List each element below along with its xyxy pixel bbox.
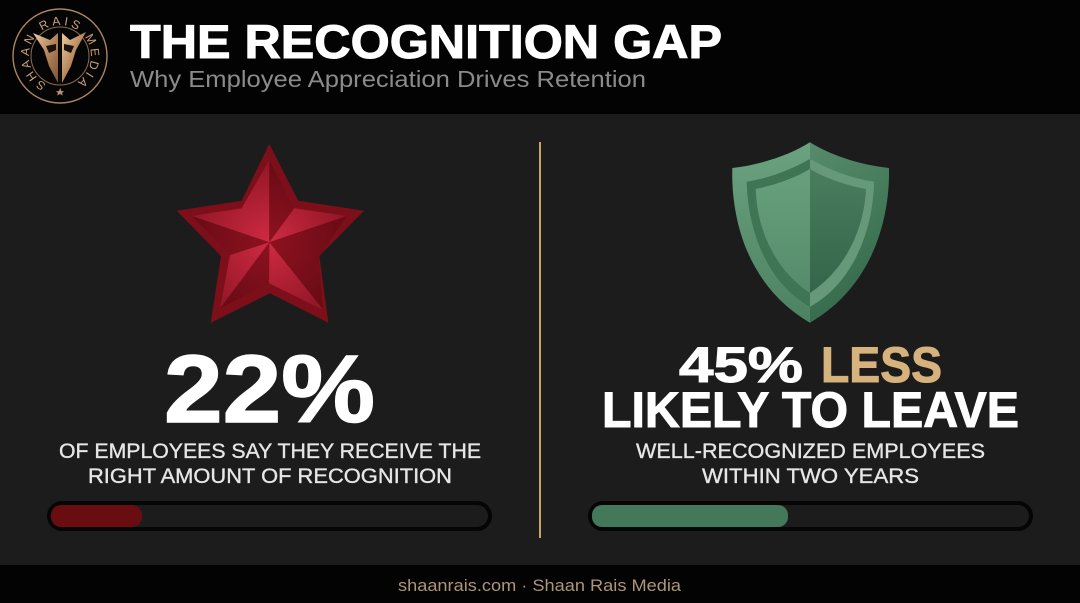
header band [0,0,1080,114]
progress bar: 22% [49,503,490,529]
footer credit: shaanrais.com · Shaan Rais Media [398,576,682,595]
logo: Shaan Rais Media emblem: SHAAN RAIS MEDIA [21,16,100,90]
icon: red star [177,144,364,323]
progress bar: 45% [590,503,1031,529]
description: recognition: RIGHT AMOUNT OF RECOGNITION [88,465,452,488]
big number: 22%: 22% [164,336,375,443]
headline: less: LESS [821,337,942,393]
description: well-recognized [636,440,985,488]
icon: green shield [732,142,889,323]
panel: left statistic [49,144,490,529]
description: recognition [59,440,481,488]
description: well-recognized: WITHIN TWO YEARS [702,465,919,488]
footer band [0,565,1080,603]
divider [539,142,541,538]
headline: likely to leave: LIKELY TO LEAVE [602,382,1019,438]
panel: right statistic [590,142,1031,529]
description: well-recognized: WELL-RECOGNIZED EMPLOYEES [636,440,985,463]
subtitle: Why Employee Appreciation Drives Retention [130,66,646,92]
description: recognition: OF EMPLOYEES SAY THEY RECEIVE THE [59,440,481,463]
title: THE RECOGNITION GAP [130,15,722,68]
headline: 45%: 45% [679,337,803,393]
